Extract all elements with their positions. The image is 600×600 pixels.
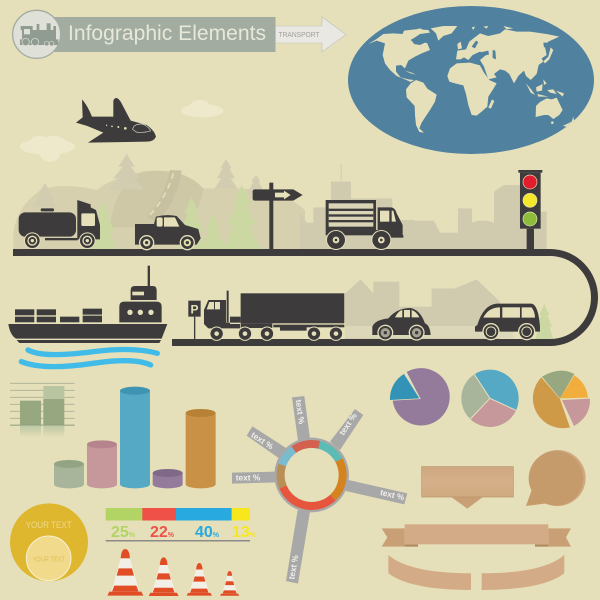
cylinder: pink (87, 440, 117, 488)
radial ring chart (232, 396, 407, 584)
cloud: left (20, 136, 75, 162)
cargo ship (8, 266, 167, 343)
South-east Asia (526, 79, 564, 97)
label: 25%: 25% (111, 524, 136, 541)
Madagascar (488, 99, 494, 109)
label: top right: text % (337, 411, 359, 437)
circle badge: your text: YOUR TEXT (26, 520, 72, 530)
South America (406, 80, 437, 133)
semi truck (204, 291, 344, 340)
cone 3 (187, 563, 212, 596)
curved ribbon: right (482, 555, 564, 590)
traffic cones (107, 549, 239, 596)
parking sign (188, 301, 201, 339)
cylinder: orange (186, 409, 216, 488)
pie chart: three part (461, 370, 519, 427)
road (13, 252, 594, 342)
water waves (21, 350, 157, 367)
pie chart: purple (390, 368, 450, 425)
Africa (447, 63, 497, 116)
curved ribbon: left (388, 555, 471, 590)
tanker truck (19, 200, 100, 249)
label: top: text % (294, 399, 307, 425)
cone 1 (107, 549, 143, 596)
label: 13%: 13% (232, 524, 257, 541)
cone 4 (220, 571, 239, 596)
cloud: right (181, 100, 223, 117)
Eurasia (456, 29, 559, 83)
cylinder: blue (120, 387, 150, 488)
box truck (326, 200, 403, 250)
scene: town houses (345, 279, 553, 339)
pickup truck (135, 215, 201, 250)
title banner (50, 17, 276, 52)
grid bar chart (10, 383, 75, 437)
New Zealand (563, 117, 574, 127)
inland seas (411, 36, 549, 59)
label: upper left: text % (249, 430, 276, 452)
label: 40%: 40% (195, 524, 220, 541)
circle badge: your text (10, 503, 88, 581)
scene: hills and trees (13, 154, 305, 249)
minivan (475, 304, 540, 340)
title text: Infographic Elements (68, 21, 266, 45)
Australia (536, 98, 563, 119)
cone 2 (149, 557, 179, 596)
Japan (543, 47, 553, 63)
label: bottom: text % (286, 554, 301, 580)
Greenland (431, 26, 457, 41)
UK and islands (457, 42, 462, 49)
arrow label: TRANSPORT (278, 30, 320, 39)
label: left: text % (236, 473, 261, 483)
scene: city skyline (300, 164, 547, 249)
cylinder: purple (153, 469, 183, 488)
arrow: transport (276, 17, 346, 52)
ribbon banner (382, 524, 571, 547)
signpost (253, 183, 303, 249)
North America (368, 29, 430, 82)
traffic light (518, 170, 542, 250)
icon: airplane (76, 98, 156, 143)
label: 22%: 22% (150, 524, 175, 541)
cylinder: green (54, 460, 84, 488)
label box banner (422, 467, 513, 509)
circle badge: your text: YOUR TEXT (32, 557, 66, 564)
pie chart: four part (533, 371, 590, 428)
icon: train badge (13, 10, 61, 58)
compact car (372, 308, 431, 341)
icon: green tree (535, 304, 553, 339)
speech bubble (526, 450, 586, 506)
label: right: text % (379, 487, 406, 502)
world map (348, 6, 594, 154)
percentage bar (106, 508, 257, 542)
Caribbean (405, 71, 416, 75)
parking sign: P (190, 302, 198, 316)
cylinder chart (54, 387, 216, 488)
